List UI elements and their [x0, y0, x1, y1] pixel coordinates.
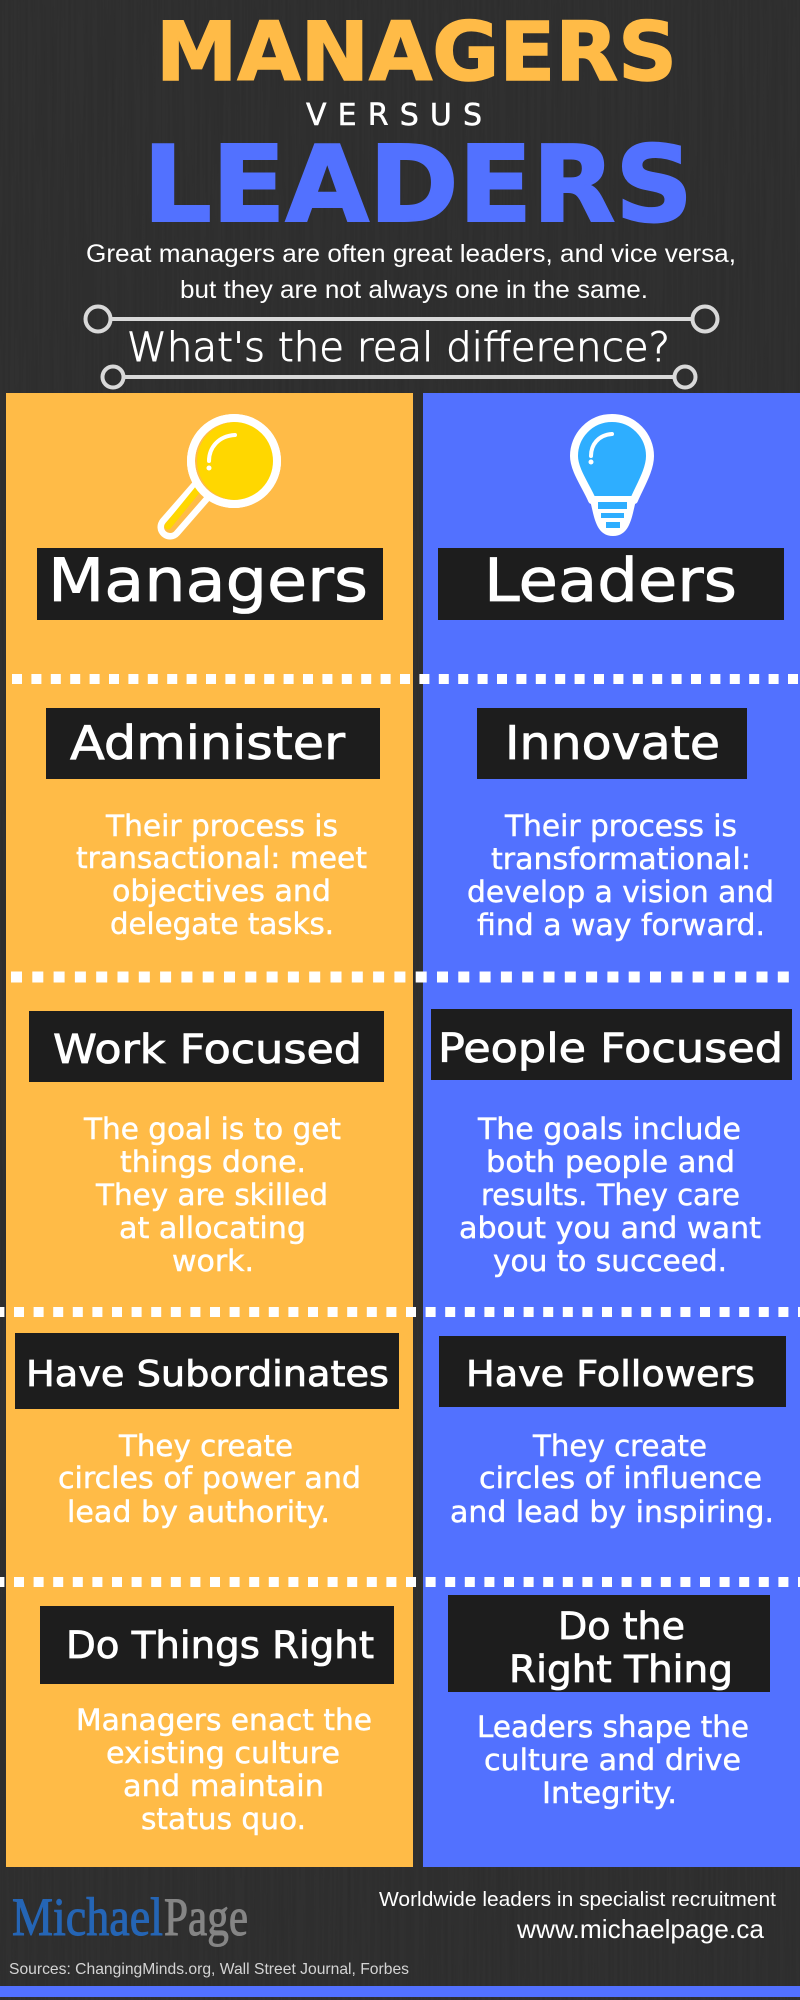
row 2 leaders: people focused: about you and want — [459, 1211, 761, 1245]
row 1 leaders: innovate — [467, 708, 774, 942]
row 2 leaders: people focused: People Focused — [438, 1026, 783, 1072]
row 4 managers: do things right: Do Things Right — [66, 1624, 374, 1667]
row 1 leaders: innovate: transformational: — [491, 842, 751, 876]
decorative top connector — [86, 306, 718, 332]
panel: managers — [6, 393, 413, 1867]
row 3 leaders: have followers: circles of influence — [479, 1461, 762, 1495]
sources: Sources: ChangingMinds.org, Wall Street Journal, Forbes — [9, 1961, 409, 1978]
row 2 managers: work focused — [29, 1011, 384, 1278]
decorative bottom connector — [102, 366, 696, 388]
row 2 managers: work focused: things done. — [120, 1145, 306, 1179]
row 2 leaders: people focused: both people and — [486, 1145, 735, 1179]
subheading: What's the real difference? — [127, 325, 670, 371]
row 4 leaders: do the right thing: culture and drive — [484, 1743, 741, 1777]
row 3 managers: have subordinates: lead by authority. — [67, 1495, 330, 1529]
row 3 managers: have subordinates: Have Subordinates — [26, 1354, 389, 1395]
row 2 leaders: people focused: results. They care — [481, 1178, 740, 1212]
row 4 leaders: do the right thing: Do the — [558, 1605, 685, 1648]
row 2 managers: work focused: work. — [172, 1244, 254, 1278]
row 1 leaders: innovate: find a way forward. — [477, 908, 765, 942]
row 3 leaders: have followers: Have Followers — [466, 1354, 755, 1395]
row 1 leaders: innovate: Their process is — [504, 809, 737, 843]
row 4 managers: do things right — [40, 1606, 394, 1836]
icon: magnifying glass — [168, 418, 277, 527]
row 3 managers: have subordinates — [15, 1333, 399, 1529]
title: MANAGERS: MANAGERS — [156, 6, 677, 100]
row 3 leaders: have followers — [439, 1336, 786, 1529]
row 4 leaders: do the right thing: Leaders shape the — [477, 1710, 749, 1744]
row 1 managers: administer — [46, 708, 380, 941]
row 3 leaders: have followers: and lead by inspiring. — [450, 1495, 774, 1529]
row 4 managers: do things right: Managers enact the — [76, 1703, 372, 1737]
row 3 managers: have subordinates: circles of power and — [58, 1461, 361, 1495]
row 3 leaders: have followers: They create — [532, 1429, 707, 1463]
row 2 managers: work focused: The goal is to get — [83, 1112, 341, 1146]
row 4 managers: do things right: existing culture — [106, 1736, 340, 1770]
intro text: Great managers are often great leaders, and vice versa, — [86, 240, 736, 268]
bottom bar — [0, 1986, 800, 1997]
heading: leaders: Leaders — [484, 546, 737, 616]
title: LEADERS: LEADERS — [143, 124, 693, 246]
row 2 managers: work focused: Work Focused — [53, 1027, 362, 1073]
row 2 leaders: people focused: you to succeed. — [493, 1244, 727, 1278]
row 4 managers: do things right: status quo. — [141, 1802, 306, 1836]
panel: leaders — [423, 393, 800, 1867]
row 1 managers: administer: delegate tasks. — [110, 907, 334, 941]
logo: Michael Page: Michael — [12, 1887, 163, 1947]
row 2 leaders: people focused: The goals include — [477, 1112, 741, 1146]
intro text — [86, 240, 736, 304]
row 4 leaders: do the right thing: Right Thing — [509, 1648, 733, 1691]
row 2 leaders: people focused — [431, 1009, 792, 1278]
row 2 managers: work focused: They are skilled — [95, 1178, 328, 1212]
row 1 leaders: innovate: Innovate — [505, 716, 720, 770]
row 4 managers: do things right: and maintain — [123, 1769, 324, 1803]
footer url: www.michaelpage.ca — [516, 1914, 765, 1944]
title: VERSUS: VERSUS — [306, 98, 482, 133]
logo: Michael Page: Page — [164, 1887, 248, 1947]
row 1 managers: administer: transactional: meet — [76, 841, 367, 875]
row 2 managers: work focused: at allocating — [119, 1211, 306, 1245]
row 1 managers: administer: Their process is — [105, 809, 338, 843]
row 1 managers: administer: objectives and — [112, 874, 331, 908]
row 1 managers: administer: Administer — [70, 716, 345, 770]
icon: light bulb — [574, 418, 650, 536]
heading: managers: Managers — [48, 546, 368, 616]
row 4 leaders: do the right thing — [448, 1595, 770, 1810]
row 4 leaders: do the right thing: Integrity. — [542, 1776, 677, 1810]
intro text: but they are not always one in the same. — [180, 276, 648, 304]
row 3 managers: have subordinates: They create — [118, 1429, 293, 1463]
footer tagline: Worldwide leaders in specialist recruitment — [379, 1889, 776, 1911]
row 1 leaders: innovate: develop a vision and — [467, 875, 774, 909]
heading: leaders — [438, 546, 784, 620]
